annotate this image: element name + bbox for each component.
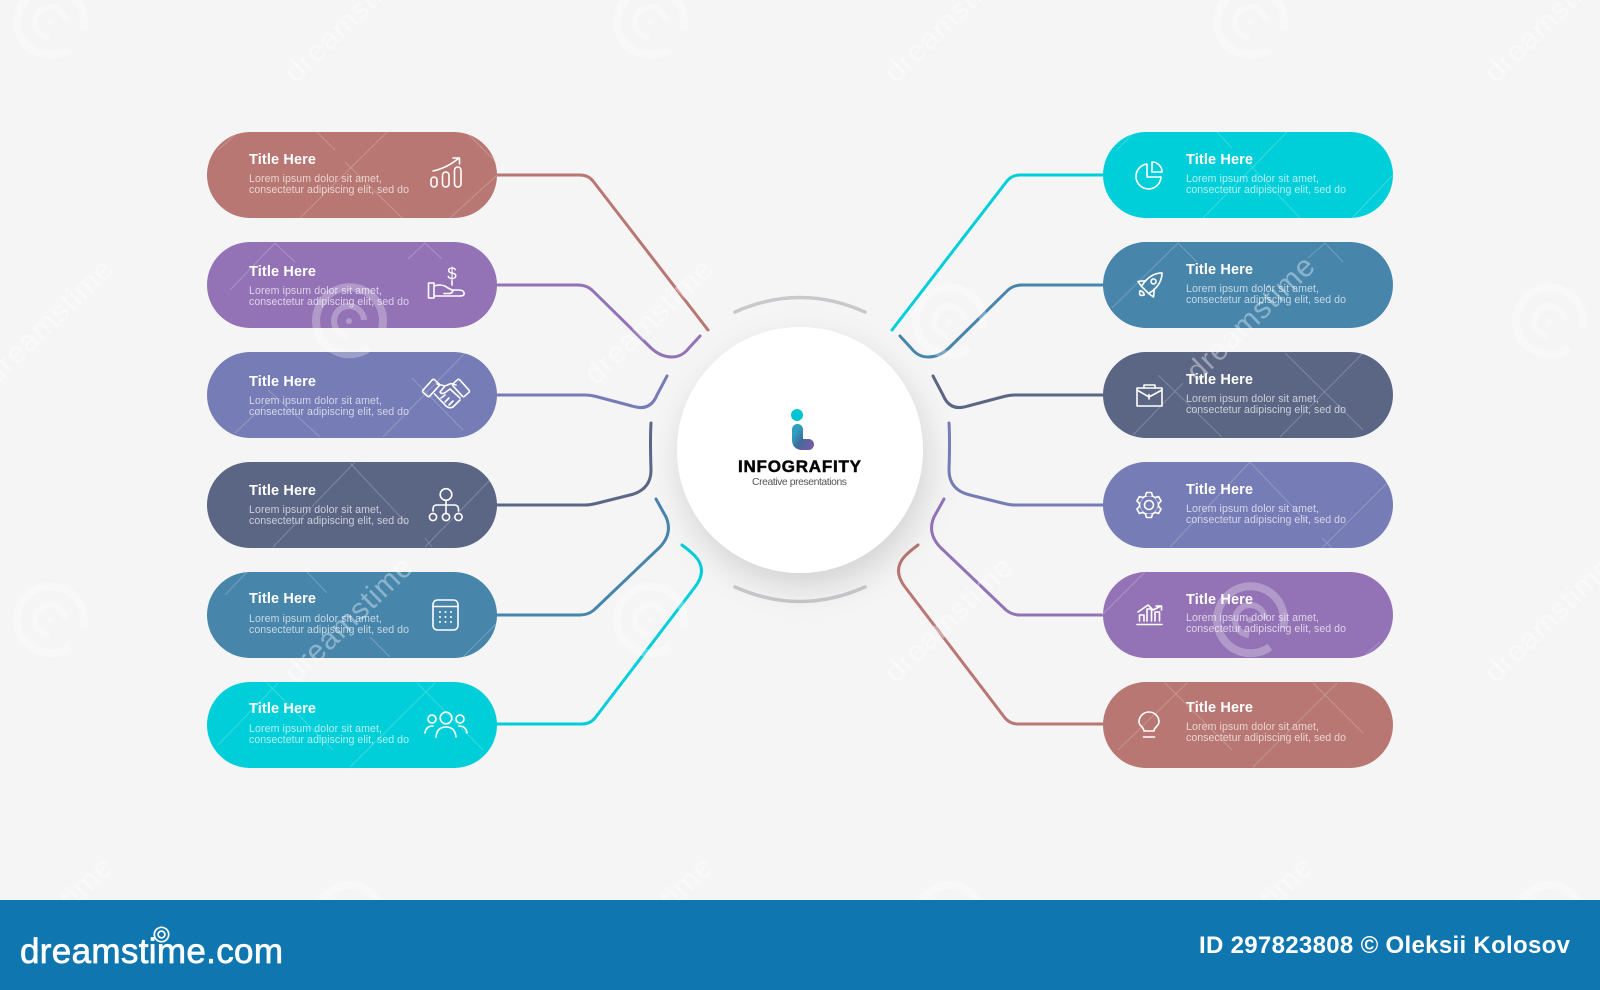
body text: Lorem ipsum dolor sit amet, xyxy=(1186,503,1319,515)
footer logo: dreamstime.com xyxy=(20,932,283,971)
body text: Lorem ipsum dolor sit amet, xyxy=(249,504,382,516)
pill xyxy=(1103,242,1393,328)
pill xyxy=(1103,462,1393,548)
body text: Lorem ipsum dolor sit amet, xyxy=(249,613,382,625)
body text xyxy=(249,173,409,196)
body text: consectetur adipiscing elit, sed do xyxy=(249,515,409,527)
body text: consectetur adipiscing elit, sed do xyxy=(1186,623,1346,635)
panel: left row 4 xyxy=(207,462,497,548)
icon: pie chart xyxy=(1136,162,1162,189)
icon: hand with dollar: $ xyxy=(447,264,457,283)
arc: top xyxy=(735,298,865,312)
pill xyxy=(207,132,497,218)
body text xyxy=(1186,173,1346,196)
watermark: dreamstime text: dreamstime xyxy=(278,551,420,689)
panel: left row 6 xyxy=(207,682,497,768)
body text: consectetur adipiscing elit, sed do xyxy=(1186,514,1346,526)
body text: consectetur adipiscing elit, sed do xyxy=(1186,732,1346,744)
pill xyxy=(1103,682,1393,768)
title: Title Here xyxy=(249,374,316,390)
panel: left row 3 xyxy=(207,352,497,438)
title: Title Here xyxy=(1186,262,1253,278)
connector: right 1 xyxy=(892,175,1103,330)
watermark: dreamstime text: dreamstime xyxy=(1178,851,1320,989)
body text xyxy=(1186,612,1346,635)
connector: left 2 xyxy=(497,285,700,357)
body text: consectetur adipiscing elit, sed do xyxy=(249,406,409,418)
body text: Lorem ipsum dolor sit amet, xyxy=(1186,721,1319,733)
watermark: crossing lines xyxy=(218,132,1393,767)
watermark: dreamstime text: dreamstime xyxy=(578,253,720,391)
body text: Lorem ipsum dolor sit amet, xyxy=(249,723,382,735)
body text xyxy=(1186,283,1346,306)
title: Title Here xyxy=(1186,152,1253,168)
body text: consectetur adipiscing elit, sed do xyxy=(249,296,409,308)
icon: bar chart with arrow xyxy=(1137,605,1162,624)
title: Title Here xyxy=(249,591,316,607)
watermark: dreamstime text: dreamstime xyxy=(1180,250,1322,388)
body text: consectetur adipiscing elit, sed do xyxy=(249,184,409,196)
icon: light bulb xyxy=(1139,712,1159,737)
footer banner xyxy=(0,900,1600,990)
body text: consectetur adipiscing elit, sed do xyxy=(249,624,409,636)
body text xyxy=(249,504,409,527)
arc: bottom xyxy=(735,587,865,602)
panel: left row 1 xyxy=(207,132,497,218)
connector: left 6 xyxy=(497,545,702,724)
logo spiral xyxy=(154,927,169,942)
pill xyxy=(1103,572,1393,658)
body text: Lorem ipsum dolor sit amet, xyxy=(249,285,382,297)
body text: Lorem ipsum dolor sit amet, xyxy=(249,173,382,185)
title: Title Here xyxy=(249,701,316,717)
pill xyxy=(207,572,497,658)
body text: Lorem ipsum dolor sit amet, xyxy=(1186,612,1319,624)
body text: consectetur adipiscing elit, sed do xyxy=(249,734,409,746)
connector: left 5 xyxy=(497,499,668,615)
connector: left 4 xyxy=(497,423,651,505)
title: Title Here xyxy=(1186,372,1253,388)
panel: left row 2 xyxy=(207,242,497,328)
icon: hand with dollar xyxy=(428,264,464,298)
panel: right row 1 xyxy=(1103,132,1393,218)
pill xyxy=(207,242,497,328)
connector: right 6 xyxy=(898,545,1103,724)
body text: Lorem ipsum dolor sit amet, xyxy=(1186,173,1319,185)
connector: left 3 xyxy=(497,376,667,408)
connector: right 5 xyxy=(932,499,1103,615)
panel: left row 5 xyxy=(207,572,497,658)
center circle xyxy=(677,327,923,573)
connector: right 3 xyxy=(933,376,1103,408)
title: Title Here xyxy=(249,264,316,280)
panel: right row 5 xyxy=(1103,572,1393,658)
icon: rocket xyxy=(1132,265,1170,303)
body text xyxy=(1186,503,1346,526)
body text xyxy=(1186,721,1346,744)
title: Title Here xyxy=(1186,700,1253,716)
icon: people xyxy=(425,712,467,737)
panel: right row 4 xyxy=(1103,462,1393,548)
body text: Lorem ipsum dolor sit amet, xyxy=(1186,393,1319,405)
body text: consectetur adipiscing elit, sed do xyxy=(1186,184,1346,196)
connector: left 1 xyxy=(497,175,708,330)
pill xyxy=(207,352,497,438)
logo subtitle: Creative presentations xyxy=(752,477,847,488)
body text xyxy=(249,613,409,636)
pill xyxy=(1103,132,1393,218)
icon: org chart xyxy=(429,489,462,521)
watermark: dreamstime text: dreamstime xyxy=(578,851,720,989)
pill xyxy=(1103,352,1393,438)
body text: consectetur adipiscing elit, sed do xyxy=(1186,294,1346,306)
pill xyxy=(207,462,497,548)
title: Title Here xyxy=(249,152,316,168)
body text: consectetur adipiscing elit, sed do xyxy=(1186,404,1346,416)
title: Title Here xyxy=(1186,482,1253,498)
panel: right row 2 xyxy=(1103,242,1393,328)
body text: Lorem ipsum dolor sit amet, xyxy=(1186,283,1319,295)
title: Title Here xyxy=(249,483,316,499)
image id and author: ID 297823808 © Oleksii Kolosov xyxy=(1199,932,1571,959)
panel: right row 6 xyxy=(1103,682,1393,768)
icon: gear xyxy=(1136,492,1162,518)
body text: Lorem ipsum dolor sit amet, xyxy=(249,395,382,407)
connector: right 2 xyxy=(900,285,1103,357)
icon: calculator xyxy=(433,600,458,630)
body text xyxy=(249,723,409,746)
panel: right row 3 xyxy=(1103,352,1393,438)
icon: briefcase xyxy=(1137,385,1162,406)
body text xyxy=(249,395,409,418)
body text xyxy=(1186,393,1346,416)
logo mark xyxy=(791,409,808,444)
title: Title Here xyxy=(1186,592,1253,608)
watermark: dreamstime text: dreamstime xyxy=(878,551,1020,689)
logo title: INFOGRAFITY xyxy=(738,457,862,476)
icon: growth chart xyxy=(431,158,461,187)
connector: right 4 xyxy=(949,423,1103,505)
pill xyxy=(207,682,497,768)
body text xyxy=(249,285,409,308)
icon: handshake xyxy=(422,379,470,408)
